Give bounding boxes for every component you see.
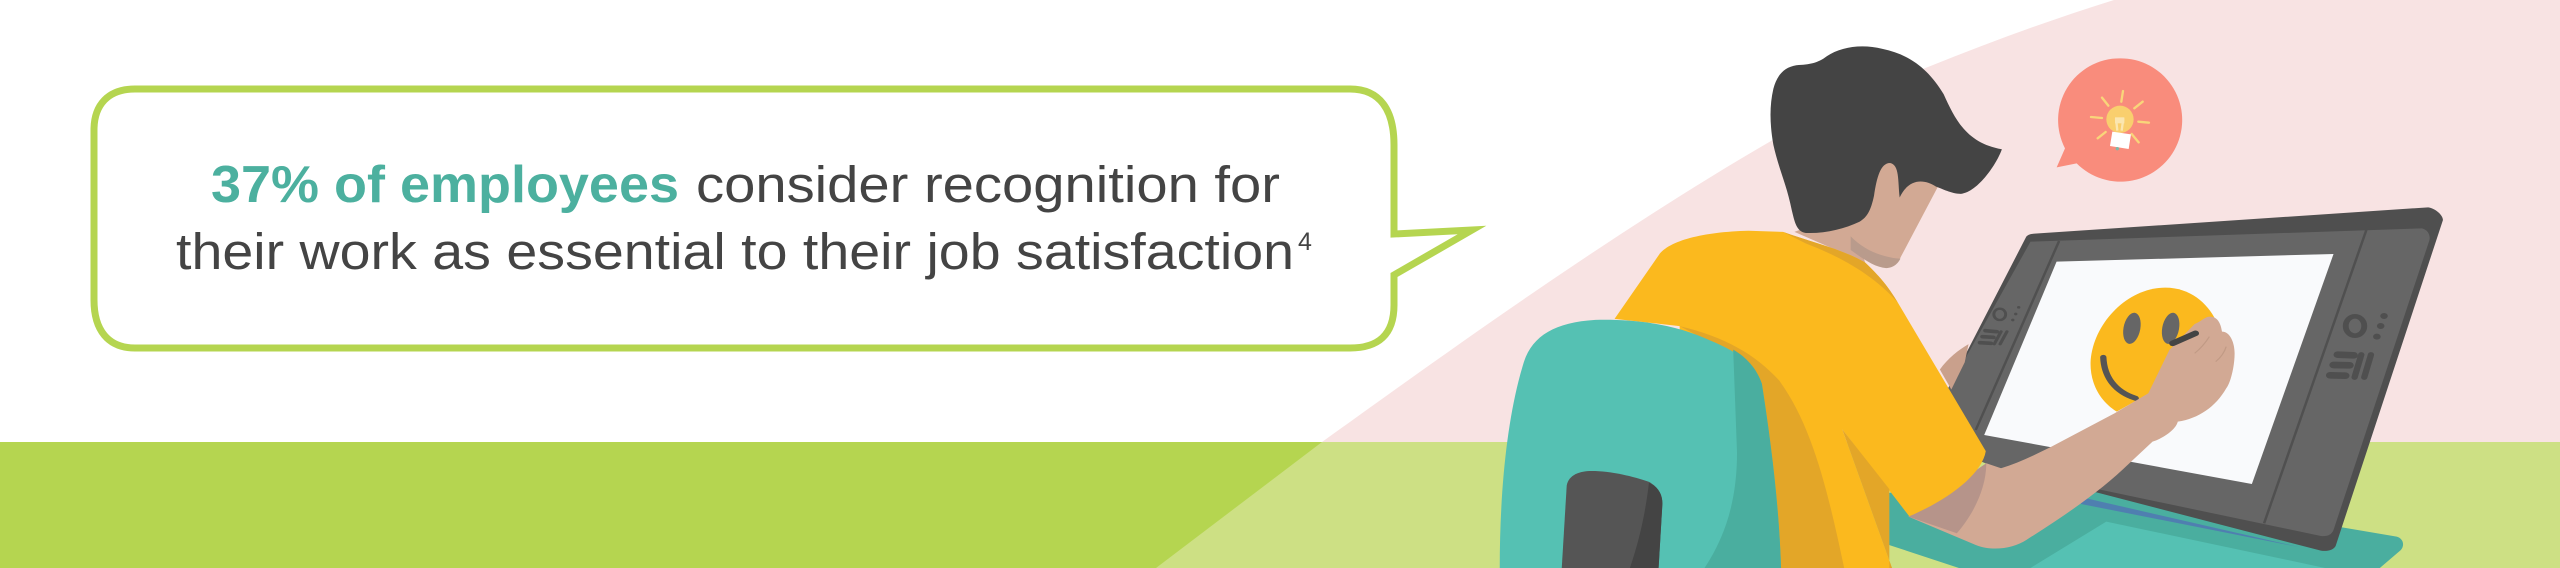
statement line 2: their work as essential to their job satisfaction xyxy=(176,223,1294,280)
light rays xyxy=(2091,91,2149,142)
bulb xyxy=(2106,106,2134,133)
footnote marker: 4 xyxy=(1298,228,1312,256)
statement line 1: consider recognition for xyxy=(696,156,1280,213)
bubble xyxy=(2057,58,2182,182)
illustration: desk mat xyxy=(1889,467,2403,568)
right tablet buttons xyxy=(2330,313,2388,377)
yellow t-shirt xyxy=(1615,231,1986,568)
office chair xyxy=(1500,320,1781,568)
idea speech bubble with lightbulb xyxy=(2057,58,2182,182)
neck and face xyxy=(1794,156,1938,268)
left tablet buttons xyxy=(1980,306,2020,344)
tablet body xyxy=(1942,207,2443,551)
tablet screen xyxy=(1984,254,2334,484)
far hand xyxy=(1940,344,1969,389)
armrest xyxy=(1562,471,1662,568)
hair xyxy=(1771,46,2002,233)
illustration: drawing tablet xyxy=(1942,207,2443,551)
drawing arm and hand xyxy=(1908,317,2235,549)
tablet face xyxy=(1942,228,2430,536)
stylus xyxy=(2173,333,2195,343)
illustration: person xyxy=(1500,46,2235,568)
smiley face xyxy=(2091,288,2216,412)
highlighted statistic: 37% of employees xyxy=(211,156,679,214)
bubble outline xyxy=(94,89,1472,348)
speech bubble callout xyxy=(94,89,1472,348)
